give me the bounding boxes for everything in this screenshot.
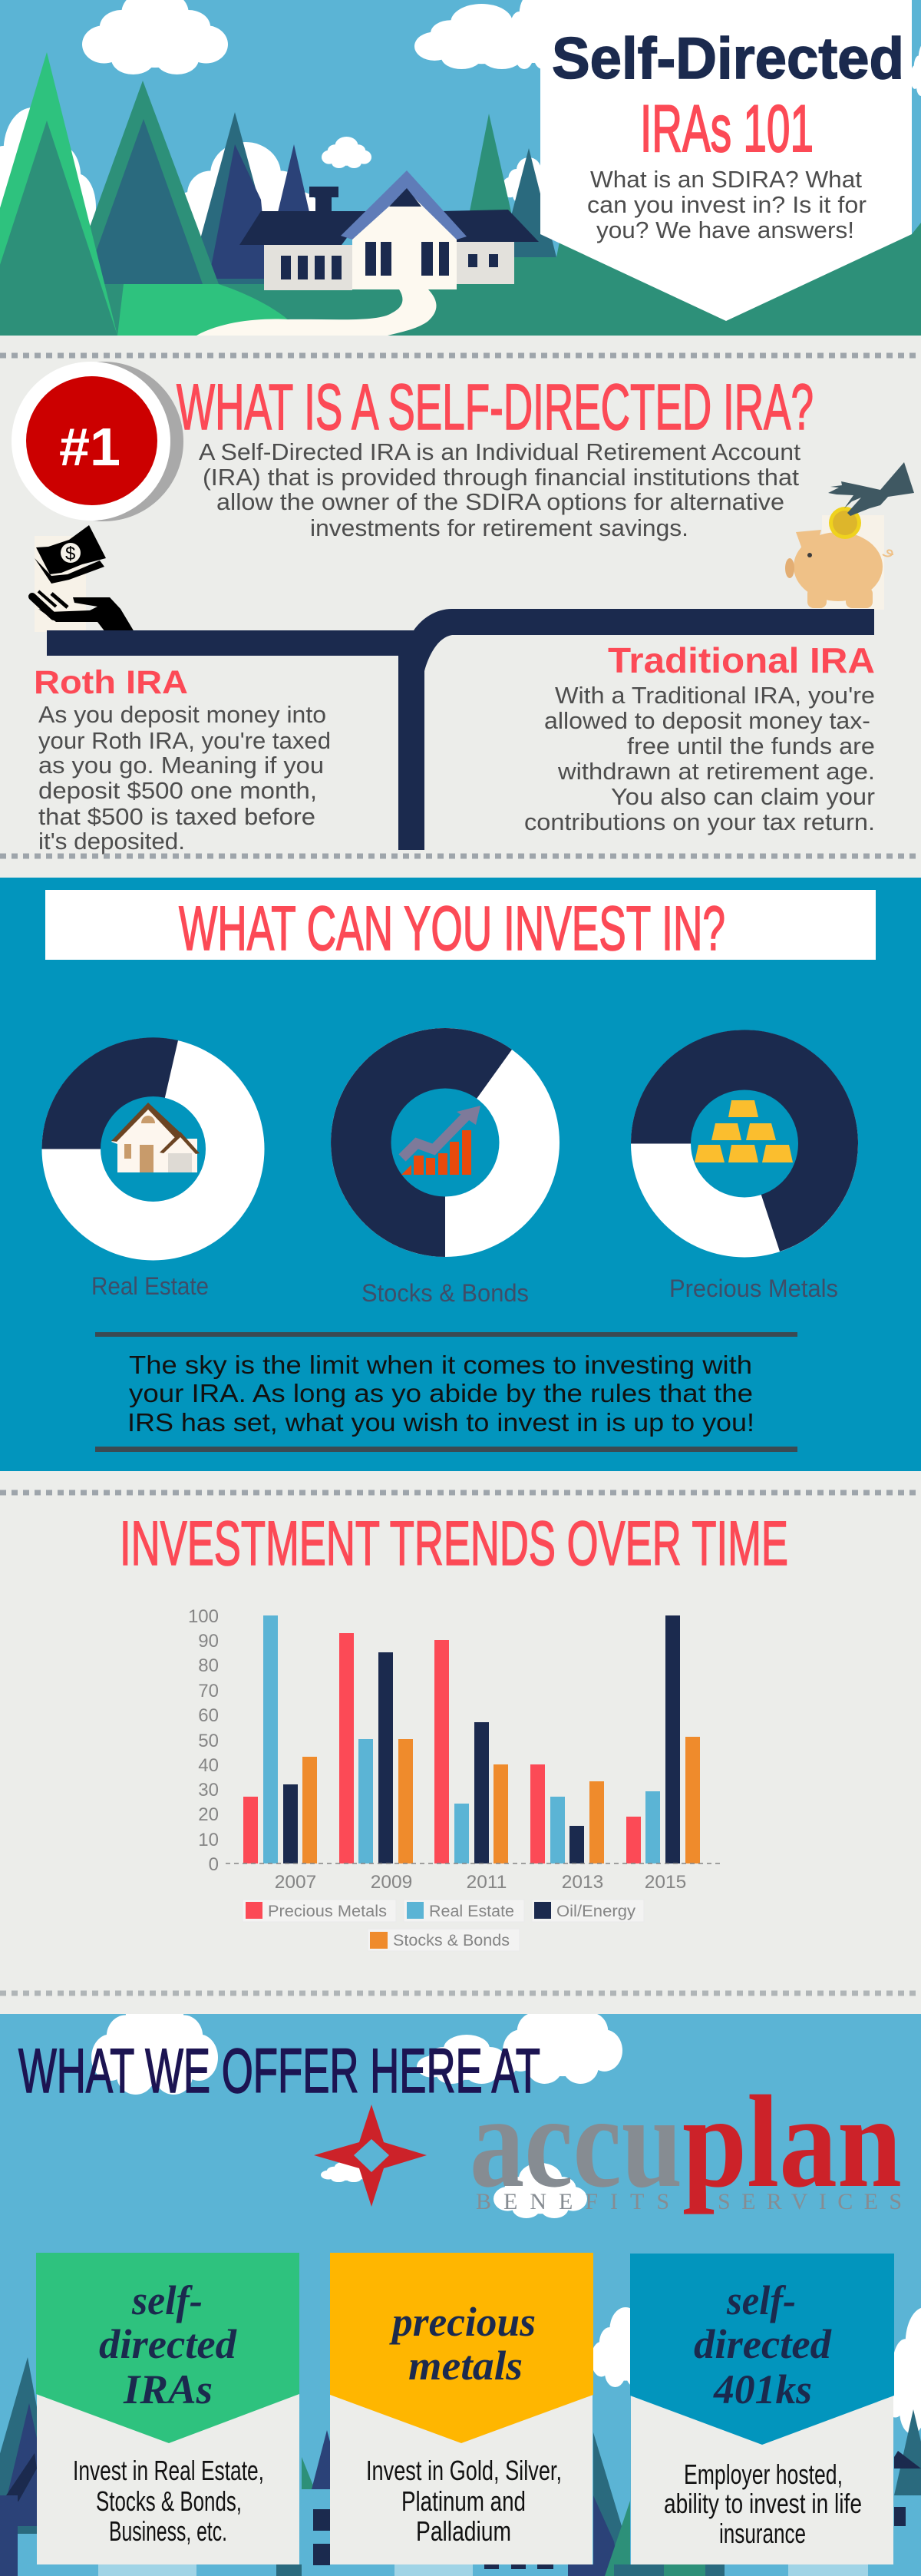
icon: gold bars (695, 1100, 793, 1162)
Roth IRA: as you go. Meaning if you (38, 752, 324, 779)
Roth IRA: it's deposited. (38, 828, 185, 855)
y axis labels (188, 1606, 219, 1875)
T-shaped bar (47, 609, 874, 850)
panel: what is a self-directed IRA (12, 362, 914, 855)
card: self-directed 401ks: directed (694, 2321, 832, 2367)
card: precious metals (330, 2253, 593, 2564)
panel: what can you invest in (0, 878, 921, 1471)
wordmark (470, 2069, 902, 2215)
bar chart (188, 1606, 722, 1951)
trees (0, 52, 556, 336)
card: self-directed 401ks: self- (726, 2277, 796, 2323)
divider (0, 1490, 921, 1496)
legend: Real Estate (429, 1903, 514, 1920)
bars 2007 (243, 1615, 317, 1863)
icon: hand with money (32, 525, 134, 632)
Roth IRA: deposit $500 one month, (38, 777, 317, 804)
icon: house (111, 1103, 200, 1172)
y axis labels: 80 (198, 1655, 219, 1676)
wordmark: accu (470, 2069, 682, 2215)
closing text: your IRA. As long as yo abide by the rules that the (129, 1379, 753, 1407)
Roth IRA (34, 664, 331, 855)
background village (0, 2357, 921, 2576)
card: self-directed 401ks: ability to invest in life (664, 2488, 862, 2519)
label: real estate: Real Estate (91, 1272, 209, 1300)
heading: WHAT WE OFFER HERE AT (18, 2036, 540, 2106)
icon: compass star (314, 2105, 427, 2207)
logo: accuplan (314, 2069, 902, 2215)
definition text (199, 438, 801, 541)
divider (0, 1990, 921, 1996)
Roth IRA: Roth IRA (34, 664, 188, 701)
card: self-directed 401ks: 401ks (713, 2366, 812, 2412)
donut: precious metals (631, 1030, 858, 1258)
Traditional IRA: You also can claim your (611, 783, 875, 810)
y axis labels: 40 (198, 1755, 219, 1776)
y axis labels: 0 (209, 1854, 219, 1875)
Roth IRA: your Roth IRA, you're taxed (38, 727, 331, 754)
badge: #1 (12, 362, 183, 521)
subtitle (587, 166, 867, 243)
panel: header landscape (0, 0, 921, 336)
closing text: The sky is the limit when it comes to investing with (129, 1351, 752, 1379)
Traditional IRA: With a Traditional IRA, you're (555, 682, 875, 709)
legend (243, 1900, 644, 1951)
closing text: IRS has set, what you wish to invest in is up to you! (127, 1408, 754, 1437)
card: precious metals: Invest in Gold, Silver, (366, 2455, 562, 2486)
Roth IRA: As you deposit money into (38, 701, 326, 728)
card: self-directed IRAs (36, 2253, 299, 2564)
x axis labels: 2013 (562, 1872, 603, 1893)
Traditional IRA: free until the funds are (627, 732, 875, 759)
Traditional IRA: allowed to deposit money tax- (544, 707, 870, 734)
y axis labels: 90 (198, 1631, 219, 1652)
definition text: (IRA) that is provided through financial institutions that (203, 464, 799, 491)
wordmark: BENEFITS (476, 2189, 669, 2214)
clouds (0, 0, 921, 261)
ground (0, 223, 921, 336)
y axis labels: 50 (198, 1731, 219, 1751)
divider (0, 854, 921, 858)
card: precious metals: Platinum and (401, 2485, 526, 2517)
x axis labels: 2015 (645, 1872, 686, 1893)
x axis labels: 2011 (467, 1872, 507, 1893)
bars 2009 (339, 1633, 413, 1863)
x axis labels (275, 1872, 686, 1893)
bars 2011 (434, 1640, 508, 1863)
card: precious metals: precious (389, 2299, 536, 2345)
definition text: allow the owner of the SDIRA options for alternative (216, 488, 784, 515)
card: self-directed IRAs: directed (99, 2321, 237, 2367)
definition text: investments for retirement savings. (310, 514, 688, 541)
badge: #1: #1 (59, 417, 120, 477)
divider (0, 353, 921, 358)
Roth IRA: that $500 is taxed before (38, 803, 315, 830)
y axis labels: 10 (198, 1830, 219, 1850)
bars 2013 (530, 1764, 604, 1863)
legend: Stocks & Bonds (393, 1932, 510, 1949)
card: self-directed 401ks: insurance (719, 2518, 806, 2549)
card: self-directed IRAs: self- (131, 2277, 203, 2323)
title: Self-Directed: Self-Directed (552, 26, 904, 91)
y axis labels: 60 (198, 1705, 219, 1726)
closing text (127, 1351, 754, 1437)
wordmark: SERVICES (718, 2189, 902, 2214)
subtitle: What is an SDIRA? What (590, 166, 862, 193)
legend: Precious Metals (268, 1903, 387, 1920)
x axis labels: 2009 (371, 1872, 412, 1893)
subtitle: you? We have answers! (596, 217, 854, 243)
icon: hand with money: $ (65, 544, 75, 564)
Traditional IRA: contributions on your tax return. (524, 809, 875, 835)
label: precious metals: Precious Metals (669, 1275, 838, 1302)
definition text: A Self-Directed IRA is an Individual Retirement Account (199, 438, 801, 465)
card: self-directed IRAs: Stocks & Bonds, (96, 2485, 242, 2517)
donut: stocks and bonds (331, 1028, 560, 1257)
icon: house (239, 170, 539, 290)
label: stocks and bonds: Stocks & Bonds (361, 1279, 529, 1307)
card: self-directed IRAs: Business, etc. (109, 2515, 227, 2547)
subtitle: can you invest in? Is it for (587, 191, 867, 218)
winding path (196, 289, 436, 336)
Traditional IRA (524, 640, 875, 835)
icon: piggy bank (785, 462, 914, 610)
y axis labels: 20 (198, 1804, 219, 1825)
legend: Oil/Energy (556, 1903, 636, 1920)
card: precious metals: metals (408, 2343, 523, 2389)
y axis labels: 100 (188, 1606, 219, 1627)
icon: rising chart (401, 1106, 480, 1175)
background clouds (91, 1989, 921, 2434)
card: self-directed IRAs: IRAs (123, 2366, 213, 2412)
Traditional IRA: withdrawn at retirement age. (557, 758, 875, 785)
card: self-directed 401ks (630, 2254, 894, 2564)
Traditional IRA: Traditional IRA (608, 640, 875, 680)
card: self-directed IRAs: Invest in Real Estate, (73, 2455, 264, 2486)
y axis labels: 30 (198, 1780, 219, 1801)
card: precious metals: Palladium (416, 2515, 511, 2547)
card: self-directed 401ks: Employer hosted, (684, 2459, 843, 2490)
bars 2015 (626, 1615, 700, 1863)
title banner (540, 0, 912, 321)
donut: real estate (41, 1037, 264, 1261)
x axis labels: 2007 (275, 1872, 316, 1893)
y axis labels: 70 (198, 1681, 219, 1701)
panel: what we offer (0, 1989, 921, 2576)
title: IRAs 101: IRAs 101 (640, 92, 814, 166)
